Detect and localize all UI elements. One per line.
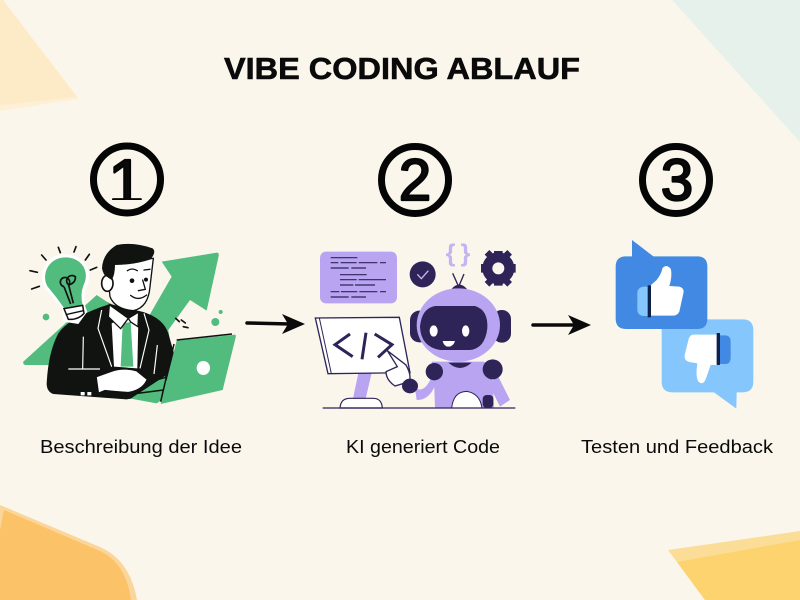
icon: motion ticks <box>176 318 188 328</box>
label: step 3: Testen und Feedback <box>581 437 774 457</box>
icon: gear <box>481 250 516 287</box>
illustration: businessman with idea <box>23 244 236 404</box>
step number 2: 2 <box>399 148 431 213</box>
icon: code panel <box>320 252 397 303</box>
label: step 2: KI generiert Code <box>346 437 500 457</box>
icon: bulb rays <box>30 247 97 289</box>
arrow: step 2 to step 3 <box>533 315 591 335</box>
icon: jacket outlines <box>68 310 157 374</box>
illustration: robot at computer <box>315 239 516 408</box>
illustration: feedback speech bubbles <box>616 240 753 409</box>
step number 1: 1 <box>108 146 144 218</box>
corner shape: top right triangle <box>672 0 800 142</box>
icon: desk line <box>323 406 515 410</box>
icon: monitor stand <box>340 372 382 408</box>
icon: jacket buttons <box>81 392 91 395</box>
label: step 1: Beschreibung der Idee <box>40 437 242 457</box>
icon: green dots <box>43 310 223 326</box>
step number 1 <box>94 146 160 218</box>
arrow: step 1 to step 2 <box>247 314 305 334</box>
icon: thumbs down bubble <box>662 319 753 409</box>
title: VIBE CODING ABLAUF <box>224 51 580 86</box>
corner shape: bottom left orange <box>0 505 137 600</box>
icon: robot body <box>415 359 510 408</box>
corner shape: bottom right yellow <box>668 531 800 600</box>
icon: robot hand pointing <box>386 351 418 393</box>
icon: thumbs up bubble <box>616 240 707 329</box>
icon: jacket <box>47 304 174 399</box>
corner shape: top left triangle <box>0 0 79 111</box>
icon: laptop <box>131 334 236 404</box>
icon: robot head <box>410 273 511 362</box>
icon: check badge <box>410 261 436 287</box>
icon: monitor screen <box>315 317 410 374</box>
step number 3 <box>642 146 710 214</box>
icon: green growth arrow <box>23 253 219 365</box>
icon: hand <box>96 369 147 393</box>
icon: light bulb <box>42 254 89 324</box>
step number 3: 3 <box>661 148 693 213</box>
icon: head <box>102 244 154 311</box>
icon: curly braces: { } <box>446 239 470 267</box>
step number 2 <box>382 146 448 214</box>
icon: shirt and tie <box>108 305 139 368</box>
